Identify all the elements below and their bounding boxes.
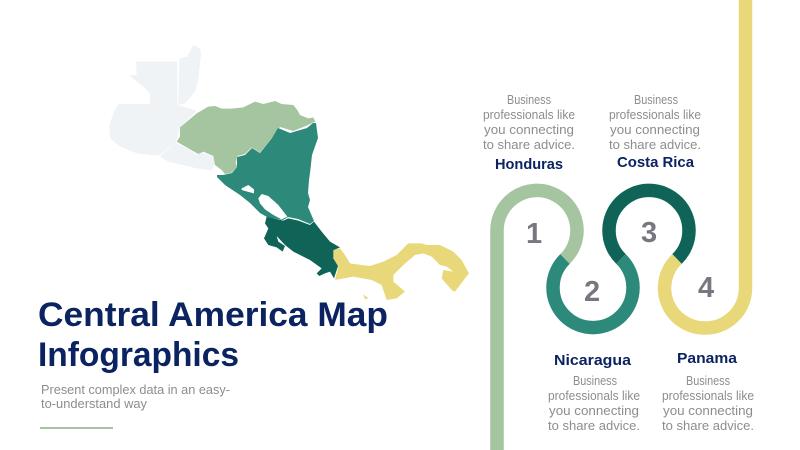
Costa Rica text block: to share advice. [609,138,701,152]
map: Guatemala [109,62,197,156]
title: Central America Map [38,296,388,334]
number 1: 1 [526,218,542,250]
path segment 3 [609,190,689,259]
path segment 4 [665,0,746,328]
Costa Rica text block: Business [634,93,678,107]
Panama text block: to share advice. [662,419,754,433]
Panama text block: you connecting [663,404,753,418]
map: Lake Managua [242,185,254,193]
map: Belize [178,45,201,105]
Panama text block: Business [686,374,730,388]
Panama text block: professionals like [662,389,754,403]
winding path [497,0,746,450]
path segment 2 [553,259,633,328]
Nicaragua text block: to share advice. [548,419,640,433]
Panama label: Panama [677,350,738,367]
path segment 1 [497,190,577,450]
Costa Rica label: Costa Rica [617,154,695,171]
Honduras text block: professionals like [483,108,575,122]
map: Lake Nicaragua [258,194,287,219]
Panama text block [662,374,754,433]
Costa Rica text block: you connecting [610,123,700,137]
subtitle: to-understand way [41,397,148,411]
Nicaragua text block: professionals like [548,389,640,403]
number 4: 4 [698,272,714,304]
Honduras label: Honduras [495,156,563,173]
map: Panama [333,243,469,300]
title underline [40,427,113,429]
Costa Rica text block [609,93,701,152]
Nicaragua label: Nicaragua [554,352,632,369]
map: Honduras [177,101,315,174]
subtitle [41,383,230,411]
map: Nicaragua [217,123,318,224]
number 3: 3 [641,217,657,249]
map: Panama island [363,294,368,299]
Nicaragua text block [548,374,640,433]
Honduras text block: to share advice. [483,138,575,152]
title: Infographics [38,336,239,374]
map: El Salvador [160,143,215,171]
title [38,296,388,374]
subtitle: Present complex data in an easy- [41,383,230,397]
Nicaragua text block: Business [573,374,617,388]
number 2: 2 [584,276,600,308]
Honduras text block: Business [507,93,551,107]
map of Central America [109,45,469,300]
Costa Rica text block: professionals like [609,108,701,122]
Nicaragua text block: you connecting [549,404,639,418]
Honduras text block: you connecting [484,123,574,137]
Honduras text block [483,93,575,152]
map: Costa Rica [264,217,340,278]
